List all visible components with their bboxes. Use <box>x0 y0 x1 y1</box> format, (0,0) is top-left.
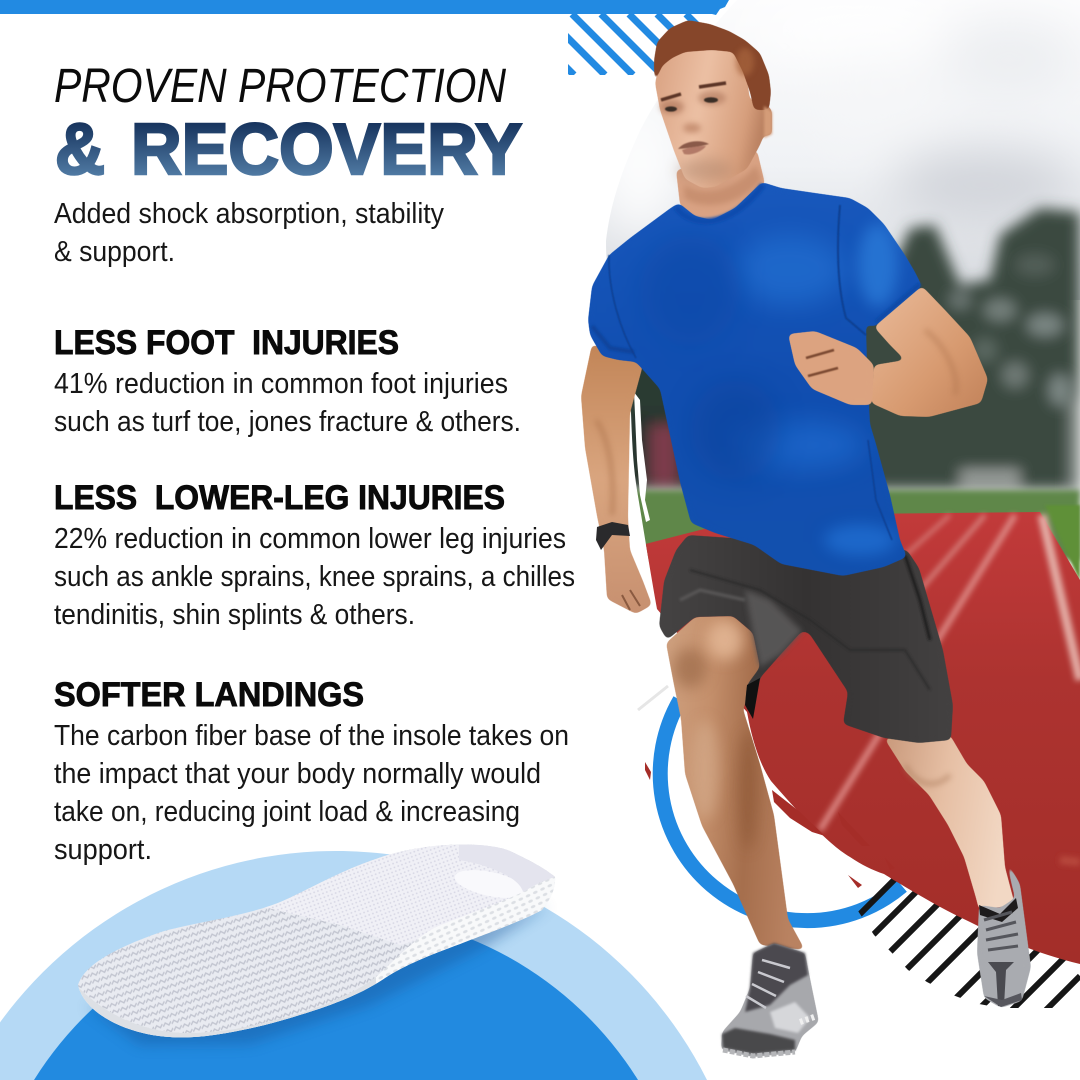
wrist watch <box>596 522 630 550</box>
back shoe <box>977 857 1031 1008</box>
faint ghost line <box>638 686 668 710</box>
mouth <box>678 141 709 155</box>
tree line <box>620 208 1080 500</box>
shorts <box>659 535 953 743</box>
right arm <box>871 286 988 417</box>
white brush fleck beside arm <box>634 392 650 522</box>
insole side wall <box>79 877 555 1038</box>
grass <box>620 490 1080 560</box>
lane lines <box>820 515 1080 862</box>
text: softer landings: the impact that your body normally would <box>54 758 541 790</box>
face <box>655 50 772 188</box>
top blue bar <box>0 0 752 15</box>
text: foot injuries: 41% reduction in common foot injuries <box>54 368 508 400</box>
shirt highlights <box>735 235 845 305</box>
grass corner <box>1045 505 1080 582</box>
front shoe <box>721 943 819 1057</box>
text: softer landings <box>54 720 569 866</box>
heading: softer landings: SOFTER LANDINGS <box>54 676 364 714</box>
hair highlight <box>736 48 754 76</box>
shirt seams <box>838 205 866 335</box>
heading: less lower-leg injuries: LESS LOWER-LEG INJURIES <box>54 479 505 517</box>
head <box>654 20 772 188</box>
text: lower-leg injuries <box>54 523 575 631</box>
front leg <box>666 616 805 950</box>
stubble <box>677 159 733 181</box>
heading: less foot injuries: LESS FOOT INJURIES <box>54 324 399 362</box>
insole shadow <box>85 905 550 1045</box>
runner <box>581 20 1031 1057</box>
eye sockets <box>660 100 684 114</box>
dark blue circle <box>34 912 638 1080</box>
text: lower-leg injuries: such as ankle sprains, knee sprains, a chilles <box>54 561 575 593</box>
blue diagonal stripes <box>568 14 700 75</box>
nose <box>683 123 701 133</box>
insole product <box>70 840 560 1060</box>
neck <box>676 150 765 222</box>
back leg <box>884 735 1015 910</box>
hair <box>654 20 771 110</box>
subtitle: Added shock absorption, stability <box>54 198 445 230</box>
insole heel hollow <box>455 870 523 898</box>
text: softer landings: support. <box>54 834 152 866</box>
left arm <box>581 344 652 614</box>
text: foot injuries: such as turf toe, jones fracture & others. <box>54 406 521 438</box>
insole heel rim <box>459 844 554 892</box>
eyebrows <box>661 83 726 100</box>
blue ring <box>660 700 902 921</box>
black diagonal stripes <box>858 878 1080 1008</box>
background photo: running track <box>590 0 1080 990</box>
insole front sole edge <box>79 977 376 1038</box>
insole arch and heel texture <box>265 845 510 944</box>
red paint flecks along photo edge <box>645 762 895 888</box>
text: lower-leg injuries: 22% reduction in common lower leg injuries <box>54 523 566 555</box>
subtitle <box>54 198 445 268</box>
shirt collar <box>676 185 763 221</box>
title line 1: PROVEN PROTECTION <box>54 60 506 113</box>
track surface <box>646 512 1080 964</box>
clouds <box>611 28 1080 236</box>
text: softer landings: take on, reducing joint load & increasing <box>54 796 520 828</box>
text: softer landings: The carbon fiber base of the insole takes on <box>54 720 569 752</box>
ear <box>764 106 772 138</box>
title line 2: & <box>55 110 105 190</box>
sky <box>590 0 1080 300</box>
knee shading <box>673 648 707 688</box>
light blue circle <box>0 851 707 1080</box>
insole forefoot weave <box>70 840 560 1045</box>
eyes <box>665 106 677 112</box>
text: foot injuries <box>54 368 521 438</box>
title line 2: RECOVERY <box>131 110 522 190</box>
text: lower-leg injuries: tendinitis, shin splints & others. <box>54 599 415 631</box>
subtitle: & support. <box>54 236 175 268</box>
shirt <box>588 182 922 576</box>
fist <box>788 331 874 405</box>
